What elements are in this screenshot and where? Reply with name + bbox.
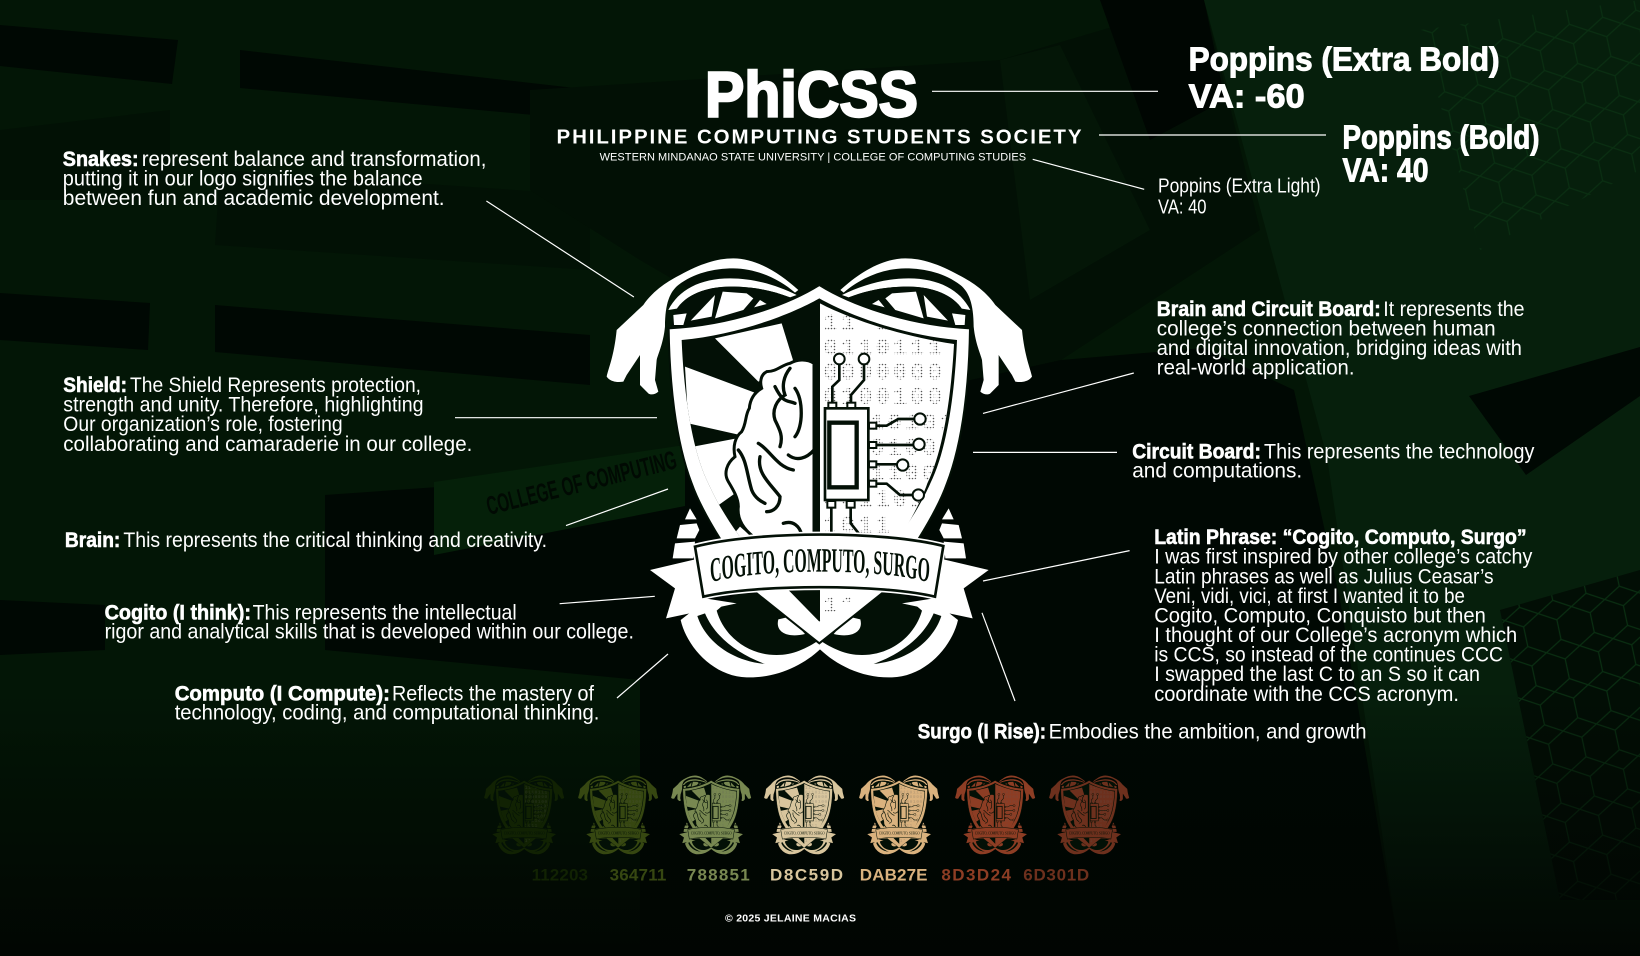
swatch emblem 364711 (578, 775, 658, 854)
text block: Latin Phrase (1154, 525, 1533, 706)
swatch emblem 8D3D24: COGITO, COMPUTO, SURGO (975, 832, 1016, 837)
font note: Poppins Bold (1342, 119, 1540, 190)
text block: Computo: technology, coding, and computational thinking. (175, 702, 599, 724)
text block: Brain and Circuit Board: Brain and Circuit Board: (1157, 297, 1381, 321)
text block: Snakes: Snakes: (63, 147, 139, 171)
swatch emblem D8C59D: COGITO, COMPUTO, SURGO (784, 832, 825, 837)
text block: Latin Phrase: I swapped the last C to an S so it can (1154, 663, 1480, 686)
text block: Computo: Reflects the mastery of (392, 683, 594, 706)
subtitle: organization name: PHILIPPINE COMPUTING STUDENTS SOCIETY (556, 125, 1082, 148)
text block: Brain: Brain: (65, 528, 120, 552)
text block: Surgo: Surgo (I Rise): (918, 719, 1046, 743)
connector: Computo (617, 654, 668, 698)
connector: Shield (455, 417, 657, 419)
text block: Surgo (918, 719, 1366, 743)
colour palette hex labels: 112203 (532, 866, 588, 885)
text block: Computo: Computo (I Compute): (175, 682, 390, 706)
font note: Poppins Bold: VA: 40 (1342, 153, 1428, 190)
colour palette hex labels: 6D301D (1023, 866, 1089, 885)
connector: name to Bold note (1099, 134, 1326, 136)
connector: Cogito (560, 596, 655, 604)
text block: Snakes: between fun and academic development. (63, 187, 445, 210)
copyright: © 2025 JELAINE MACIAS (725, 913, 856, 925)
swatch emblem 788851 (671, 775, 751, 854)
text block: Latin Phrase: coordinate with the CCS acronym. (1154, 683, 1459, 706)
text block: Latin Phrase: is CCS, so instead of the continues CCC (1154, 644, 1503, 667)
colour palette hex labels: DAB27E (860, 866, 928, 885)
swatch emblem 6D301D (1049, 775, 1129, 854)
text block: Shield: Our organization’s role, fostering (63, 413, 343, 436)
connector: Brain and Circuit Board (983, 373, 1134, 413)
swatch emblem 8D3D24 (955, 775, 1035, 854)
text block: Circuit Board (1132, 440, 1535, 482)
text block: Surgo: Embodies the ambition, and growth (1049, 720, 1366, 743)
connector: Surgo (982, 613, 1015, 701)
text block: Cogito (105, 600, 634, 643)
text block: Latin Phrase: Cogito, Computo, Conquisto but then (1154, 605, 1486, 628)
connector: title to Extra Bold note (932, 90, 1158, 92)
text block: Brain and Circuit Board: real-world application. (1157, 356, 1354, 379)
colour palette hex labels: 788851 (687, 866, 750, 885)
text block: Shield: Shield: (63, 373, 127, 397)
text block: Circuit Board: and computations. (1132, 459, 1302, 482)
connector: Latin Phrase (983, 551, 1130, 581)
font note: Poppins Extra Light (1158, 175, 1321, 218)
emblem motto: COGITO, COMPUTO, SURGO (710, 549, 930, 582)
text block: Snakes: putting it in our logo signifies the balance (63, 167, 423, 190)
swatch emblem D8C59D (764, 775, 844, 854)
font note: Poppins Extra Light: Poppins (Extra Light) (1158, 175, 1321, 197)
text block: Brain and Circuit Board: It represents the (1383, 298, 1524, 321)
text block: Shield: strength and unity. Therefore, highlighting (63, 394, 424, 417)
title: PhiCSS: PhiCSS (705, 59, 918, 131)
font note: Poppins Extra Light: VA: 40 (1158, 196, 1206, 218)
connector: university line to Extra Light note (1033, 159, 1144, 189)
background banner sign (434, 445, 685, 555)
colour palette hex labels: 8D3D24 (941, 866, 1012, 885)
text block: Shield: collaborating and camaraderie in our college. (63, 433, 472, 456)
colour palette emblems (484, 775, 1129, 854)
text block: Circuit Board: This represents the technology (1264, 440, 1535, 464)
text block: Latin Phrase: Latin phrases as well as Julius Ceasar’s (1154, 566, 1494, 588)
swatch emblem 364711: COGITO, COMPUTO, SURGO (598, 832, 639, 837)
text block: Computo (175, 682, 599, 724)
text block: Shield (63, 373, 472, 456)
swatch emblem DAB27E: COGITO, COMPUTO, SURGO (879, 832, 920, 837)
text block: Brain: This represents the critical thinking and creativity. (123, 529, 547, 552)
text block: Latin Phrase: I thought of our College’s acronym which (1154, 624, 1517, 647)
font note: Poppins Extra Bold: Poppins (Extra Bold) (1189, 42, 1500, 79)
background banner sign: COLLEGE OF COMPUTING (483, 445, 680, 521)
text block: Brain and Circuit Board (1157, 297, 1524, 379)
swatch emblem DAB27E (859, 775, 939, 854)
text block: Cogito: Cogito (I think): (105, 600, 251, 624)
text block: Circuit Board: Circuit Board: (1132, 440, 1261, 464)
colour palette hex labels: 364711 (610, 866, 666, 885)
connector: Brain (566, 489, 668, 526)
text block: Latin Phrase: I was first inspired by other college’s catchy (1154, 545, 1533, 568)
font note: Poppins Bold: Poppins (Bold) (1342, 119, 1540, 156)
text block: Brain and Circuit Board: and digital innovation, bridging ideas with (1157, 337, 1522, 360)
text block: Latin Phrase: Latin Phrase: “Cogito, Computo, Surgo” (1154, 525, 1527, 549)
colour palette hex labels (532, 866, 1089, 885)
emblem: PhiCSS crest (606, 258, 1032, 678)
connector: Circuit Board (973, 451, 1117, 453)
text block: Snakes (63, 147, 486, 210)
text block: Cogito: This represents the intellectual (253, 602, 517, 624)
text block: Snakes: represent balance and transformation, (142, 148, 486, 171)
connector: Snakes (486, 201, 634, 297)
font note: Poppins Extra Bold (1189, 42, 1500, 115)
text block: Brain and Circuit Board: college’s connection between human (1157, 317, 1496, 340)
colour palette hex labels: D8C59D (770, 866, 843, 885)
text block: Latin Phrase: Veni, vidi, vici, at first I wanted it to be (1154, 585, 1465, 608)
swatch emblem 112203: COGITO, COMPUTO, SURGO (504, 832, 545, 837)
swatch emblem 6D301D: COGITO, COMPUTO, SURGO (1069, 832, 1110, 837)
swatch emblem 112203 (484, 775, 564, 854)
subtitle: university and college: WESTERN MINDANAO STATE UNIVERSITY | COLLEGE OF COMPUTING STUDIES (600, 152, 1026, 164)
font note: Poppins Extra Bold: VA: -60 (1189, 78, 1305, 115)
swatch emblem 788851: COGITO, COMPUTO, SURGO (691, 832, 732, 837)
text block: Shield: The Shield Represents protection, (130, 374, 421, 397)
text block: Cogito: rigor and analytical skills that is developed within our college. (105, 620, 634, 643)
